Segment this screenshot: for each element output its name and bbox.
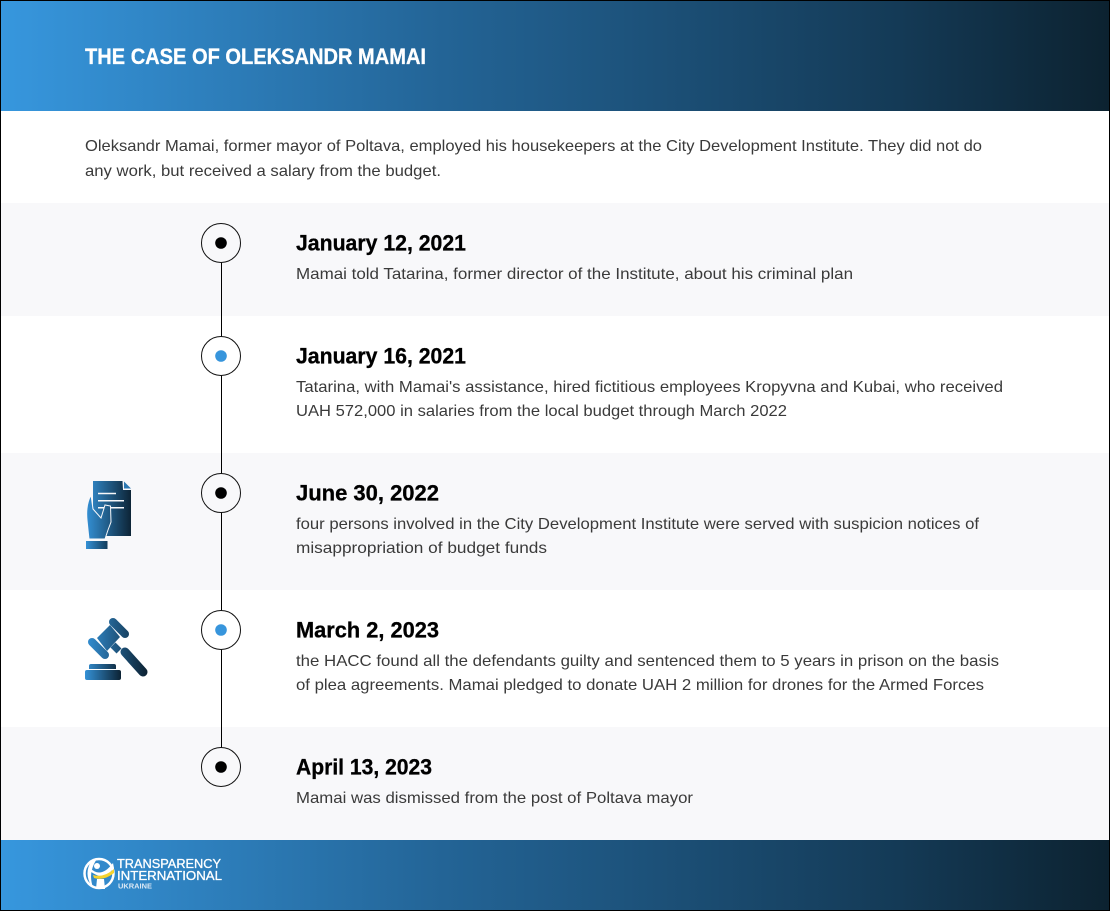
timeline node 3 xyxy=(202,474,240,512)
intro text: any work, but received a salary from the budget. xyxy=(85,163,441,180)
intro text xyxy=(85,138,982,180)
timeline node 4 xyxy=(202,610,240,650)
icon: judge gavel xyxy=(85,622,143,680)
entry 5: Mamai was dismissed from the post of Poltava mayor xyxy=(296,790,694,807)
entry 1: Mamai told Tatarina, former director of the Institute, about his criminal plan xyxy=(296,266,853,283)
timeline node 5 xyxy=(202,748,240,786)
timeline connector line xyxy=(220,262,222,748)
entry 3: four persons involved in the City Development Institute were served with suspicion notices of xyxy=(296,516,980,533)
entry 1 xyxy=(296,230,853,283)
entry 2 xyxy=(296,344,1003,420)
header banner xyxy=(0,0,1110,111)
entry 2: Tatarina, with Mamai's assistance, hired fictitious employees Kropyvna and Kubai, who received xyxy=(296,379,1003,396)
entry 2: January 16, 2021 xyxy=(296,344,466,368)
title: THE CASE OF OLEKSANDR MAMAI xyxy=(85,44,426,69)
entry 5: April 13, 2023 xyxy=(296,754,432,780)
icon: hand holding document xyxy=(86,481,131,549)
entry 4: of plea agreements. Mamai pledged to donate UAH 2 million for drones for the Armed Forces xyxy=(296,677,984,694)
entry 2: UAH 572,000 in salaries from the local budget through March 2022 xyxy=(296,403,787,420)
entry 4 xyxy=(296,618,999,694)
entry 3: misappropriation of budget funds xyxy=(296,540,547,557)
entry 3 xyxy=(296,480,980,557)
entry 4: March 2, 2023 xyxy=(296,618,439,642)
entry 3: June 30, 2022 xyxy=(296,480,439,506)
logo globe xyxy=(84,859,114,889)
timeline node 1 xyxy=(202,224,240,262)
entry 1: January 12, 2021 xyxy=(296,230,466,256)
timeline node 2 xyxy=(202,336,240,376)
entry 4: the HACC found all the defendants guilty and sentenced them to 5 years in prison on the basis xyxy=(296,653,999,670)
band: row 1 xyxy=(0,203,1110,316)
intro text: Oleksandr Mamai, former mayor of Poltava, employed his housekeepers at the City Development Institute. They did not do xyxy=(85,138,982,155)
band: row 3 xyxy=(0,453,1110,590)
footer banner xyxy=(0,840,1110,910)
logo: Transparency International Ukraine xyxy=(84,857,222,890)
logo: Transparency International Ukraine: INTERNATIONAL xyxy=(117,869,222,883)
logo wordmark: TRANSPARENCY xyxy=(117,857,222,871)
band: row 5 xyxy=(0,727,1110,840)
logo: Transparency International Ukraine: UKRAINE xyxy=(118,884,152,890)
entry 5 xyxy=(296,754,694,807)
